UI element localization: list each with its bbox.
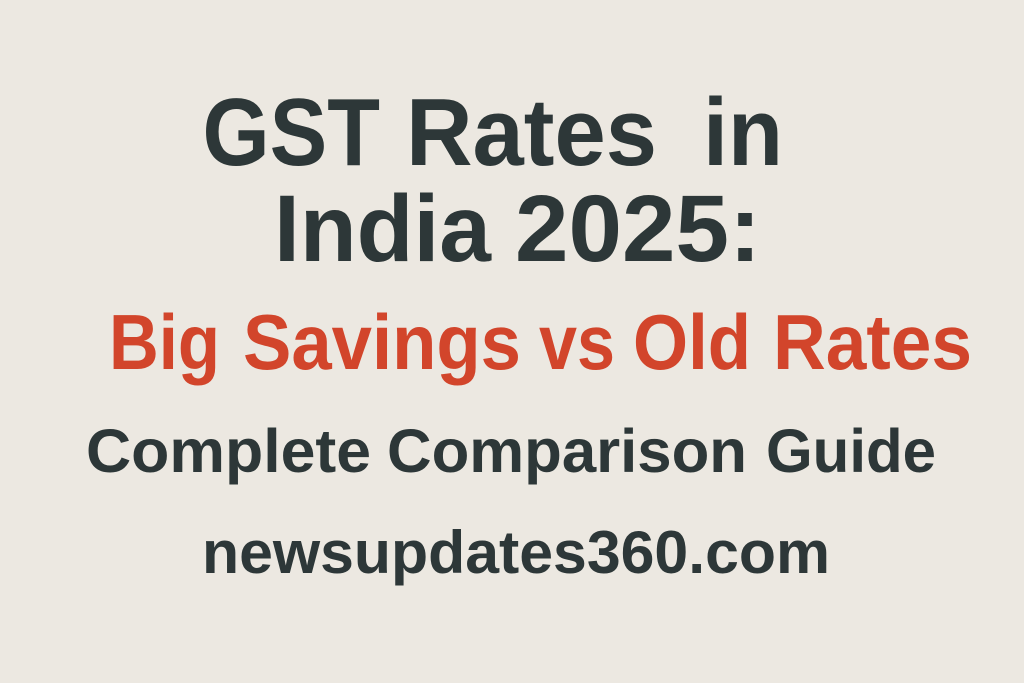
title line 2: India (274, 176, 492, 282)
title line 1: Rates (406, 79, 657, 186)
subtitle: big savings: vs (539, 300, 615, 386)
guide heading: Guide (766, 417, 936, 485)
subtitle: big savings: Big (109, 300, 220, 386)
title line 1 (202, 79, 783, 186)
title line 1: in (703, 79, 783, 186)
subtitle: big savings: Savings (243, 300, 521, 386)
title line 2 (274, 176, 761, 282)
title line 1: GST (202, 79, 380, 186)
guide heading (86, 417, 936, 485)
guide heading: Comparison (387, 417, 747, 485)
subtitle: big savings: Rates (773, 300, 972, 386)
guide heading: Complete (86, 417, 371, 485)
title line 2: 2025: (515, 176, 761, 282)
subtitle: big savings (109, 300, 972, 386)
website: newsupdates360.com (202, 519, 830, 586)
subtitle: big savings: Old (633, 300, 751, 386)
